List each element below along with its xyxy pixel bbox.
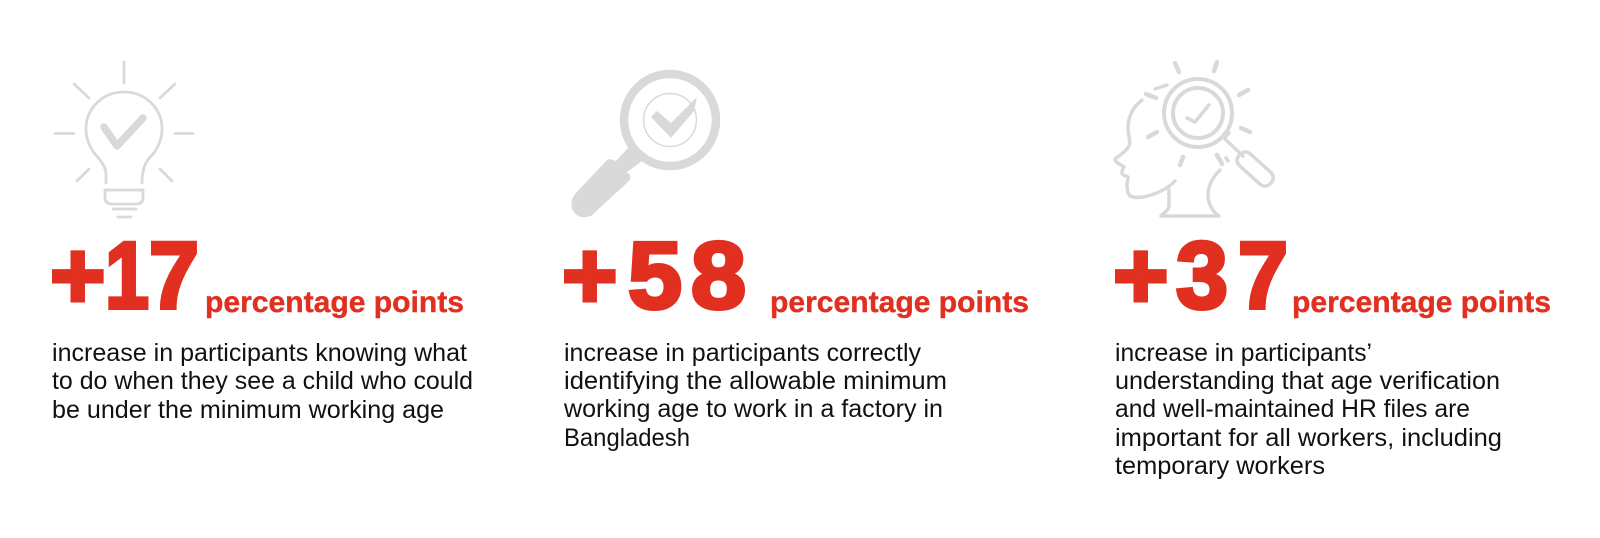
icon: head with magnifying glass	[1115, 62, 1276, 216]
big number +37: 7	[1238, 223, 1288, 329]
panel: age verification understanding	[1113, 62, 1551, 480]
icon: magnifying glass with check	[571, 74, 716, 217]
description	[1115, 339, 1502, 480]
description: to do when they see a child who could	[52, 367, 473, 395]
description: increase in participants knowing what	[52, 339, 467, 367]
big number +17: +	[50, 223, 105, 329]
description: Bangladesh	[564, 424, 690, 452]
description: be under the minimum working age	[52, 396, 444, 424]
description: temporary workers	[1115, 452, 1325, 480]
big number +37: 3	[1176, 223, 1228, 329]
unit label: percentage points	[770, 286, 1029, 319]
big number +37: +	[1113, 223, 1168, 329]
description: increase in participants correctly	[564, 339, 921, 367]
big number +58: 5	[628, 223, 682, 329]
big number +58: 8	[691, 223, 746, 329]
big number +17: 1	[105, 223, 149, 329]
unit label: percentage points	[1292, 286, 1551, 319]
panel: minimum age identification	[562, 74, 1029, 452]
big number +58	[562, 223, 746, 329]
description: increase in participants’	[1115, 339, 1372, 367]
big number +58: +	[562, 223, 617, 329]
description: identifying the allowable minimum	[564, 367, 947, 395]
big number +37	[1113, 223, 1288, 329]
description	[52, 339, 473, 424]
panel: minimum age action knowledge	[50, 62, 473, 424]
description: understanding that age verification	[1115, 367, 1500, 395]
big number +17	[50, 223, 199, 329]
description: important for all workers, including	[1115, 424, 1502, 452]
icon: light bulb with check	[55, 62, 193, 217]
unit label: percentage points	[205, 286, 464, 319]
description: and well-maintained HR files are	[1115, 395, 1470, 423]
description: working age to work in a factory in	[563, 395, 943, 423]
big number +17: 7	[149, 223, 199, 329]
description	[563, 339, 947, 452]
